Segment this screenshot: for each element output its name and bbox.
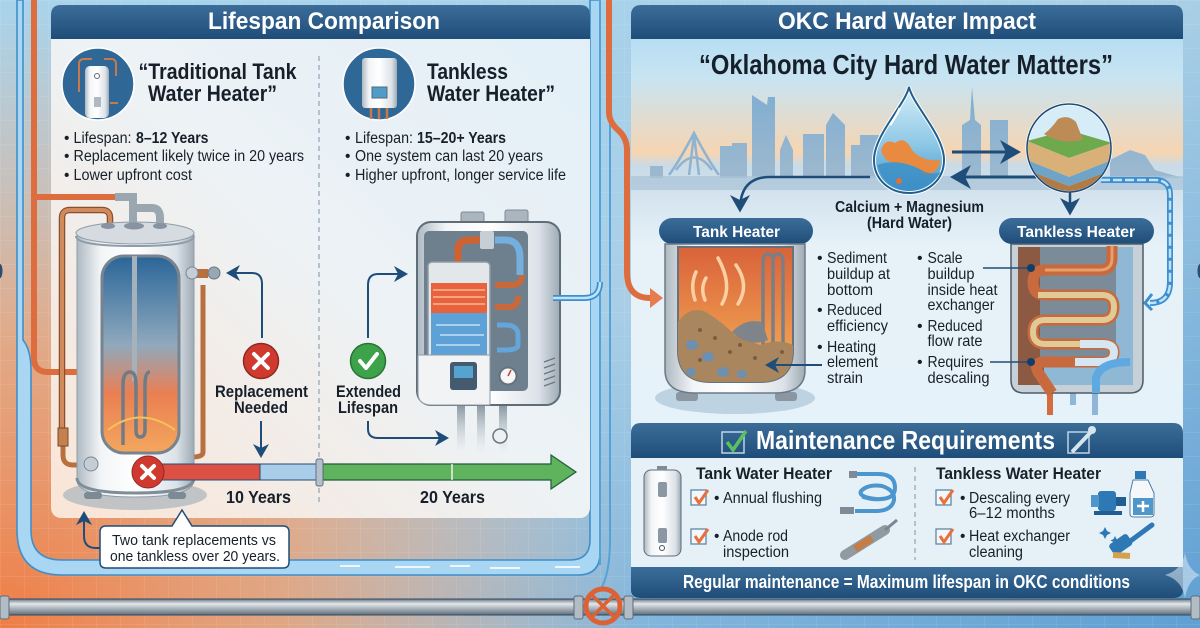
list: tank facts: Lifespan:	[74, 130, 132, 147]
text: traditional tank heading: Water Heater”	[148, 81, 277, 106]
text: traditional tank heading: “Traditional Tank	[138, 59, 297, 84]
list: tankless heater effects: •	[917, 354, 923, 371]
check box 2	[691, 529, 708, 544]
pressure valve	[186, 267, 220, 279]
icon: start x	[132, 456, 164, 488]
list: tankless maintenance: •	[960, 490, 965, 507]
icon: wrench box	[1068, 426, 1096, 453]
list: tank maintenance: •	[714, 490, 719, 507]
divider	[914, 467, 916, 560]
list: tank heater effects: •	[817, 302, 823, 319]
arrow: drop to tank heater	[740, 177, 870, 210]
heading: lifespan comparison	[51, 5, 590, 39]
label: replacement needed: Replacement	[215, 383, 308, 401]
list: tankless maintenance: cleaning	[969, 544, 1023, 561]
list: tank facts	[64, 130, 304, 184]
sparkle	[1165, 553, 1200, 598]
check box 1	[691, 490, 708, 505]
heading: OKC hard water impact	[631, 5, 1183, 39]
callout: replacements: one tankless over 20 years.	[110, 548, 280, 565]
top fittings	[115, 197, 160, 226]
label: extended lifespan: Lifespan	[338, 399, 398, 417]
leader: requires descaling	[990, 358, 1035, 366]
list: tankless heater effects: flow rate	[928, 333, 983, 350]
pill: tankless heater: Tankless Heater	[1017, 224, 1135, 241]
icon: hose	[840, 471, 895, 514]
list: tank heater effects: Heating	[827, 339, 876, 356]
list: tankless maintenance: •	[960, 528, 965, 545]
arrow: drop to geology	[952, 150, 1018, 154]
list: tankless heater effects: Reduced	[928, 318, 982, 335]
list: tankless facts: 15–20+ Years	[417, 130, 506, 147]
label: replacement needed: Needed	[234, 399, 288, 417]
arrow: tank replacement	[228, 273, 262, 338]
list: tank heater effects: Reduced	[827, 302, 882, 319]
icon: red x replacement	[244, 344, 278, 378]
illustration: tank water heater cutaway	[34, 0, 220, 510]
list: tank heater effects: Sediment	[827, 250, 887, 267]
callout: replacements: Two tank replacements vs	[112, 532, 276, 549]
water pipe to tankless	[1101, 180, 1170, 303]
icon: pump	[1091, 491, 1126, 515]
water pipe arrowhead	[1145, 294, 1152, 310]
panel: lifespan comparison	[34, 0, 600, 518]
list: tank facts: •	[64, 148, 69, 165]
list: tank heater effects: element	[827, 354, 878, 371]
list: tankless facts: •	[345, 167, 350, 184]
text: tankless heading	[427, 59, 555, 106]
list: tank heater effects: •	[817, 250, 823, 267]
list: tank facts: Replacement likely twice in 20 years	[74, 148, 304, 165]
illustration: tank sediment cutaway	[655, 244, 815, 414]
illustration: tankless water heater	[417, 210, 560, 452]
list: tankless maintenance: 6–12 months	[969, 505, 1055, 522]
list: tankless heater effects: inside heat	[928, 282, 998, 299]
panel: OKC hard water impact	[631, 5, 1183, 440]
panel: maintenance requirements	[631, 423, 1183, 598]
list: tankless heater effects	[917, 250, 998, 387]
heading: maintenance requirements: Maintenance Requirements	[756, 425, 1055, 455]
list: tank heater effects: efficiency	[827, 318, 888, 335]
list: tank facts: •	[64, 130, 69, 147]
icon: green check	[350, 344, 386, 378]
tank body	[77, 235, 194, 497]
icon: descaler bottle	[1130, 471, 1154, 517]
icon: tankless water heater	[343, 48, 415, 120]
list: tankless heater effects: Scale	[928, 250, 963, 267]
list: tankless facts: Higher upfront, longer service life	[355, 167, 566, 184]
list: tankless facts: •	[345, 148, 350, 165]
list: tankless facts: Lifespan:	[355, 130, 413, 147]
heading: tankless water heater: Tankless Water Heater	[936, 464, 1101, 483]
arrow: extended down	[368, 421, 447, 438]
timeline arrow	[132, 455, 576, 489]
skyline	[631, 87, 1183, 190]
label: calcium magnesium: (Hard Water)	[867, 215, 952, 232]
divider	[318, 56, 320, 503]
icon: valve wheel	[586, 589, 620, 623]
bottom grey pipe	[0, 589, 1200, 623]
check box 4	[936, 529, 953, 544]
icon: anode rod	[845, 520, 897, 555]
edge markers	[0, 264, 1200, 278]
water pipe exit from tankless	[553, 282, 600, 298]
footer: regular maintenance: Regular maintenance = Maximum lifespan in OKC conditions	[683, 572, 1130, 592]
water pipe channel around impact panel	[600, 0, 610, 590]
label: extended lifespan	[336, 383, 401, 417]
arrow: geology to tankless heater	[1069, 192, 1071, 213]
list: tankless heater effects: •	[917, 318, 923, 335]
check box 3	[936, 490, 953, 505]
text: traditional tank heading	[138, 59, 297, 106]
list: tank heater effects: buildup at	[827, 266, 891, 283]
heading: lifespan comparison: Lifespan Comparison	[208, 8, 440, 35]
list: tankless heater effects: Requires	[928, 354, 984, 371]
window with heating element	[102, 256, 179, 453]
leader: scale buildup	[983, 264, 1035, 272]
list: tank maintenance: •	[714, 528, 719, 545]
list: tankless maintenance: Descaling every	[969, 490, 1070, 507]
arrow: to timeline	[260, 421, 262, 456]
heading: OKC hard water impact: OKC Hard Water Impact	[778, 8, 1036, 35]
label: 20 years: 20 Years	[420, 487, 485, 507]
icon: hard water drop	[874, 87, 944, 193]
list: tank maintenance: Annual flushing	[723, 490, 822, 507]
icon: tank water heater	[62, 48, 134, 120]
control panel	[418, 355, 490, 405]
callout: replacements	[100, 510, 289, 568]
title: Oklahoma City hard water matters: “Oklahoma City Hard Water Matters”	[699, 49, 1113, 80]
copper loop pipe	[62, 210, 110, 430]
white water highlights	[340, 566, 580, 568]
icon: mini tank heater	[644, 466, 681, 556]
pill: tank heater	[659, 218, 813, 244]
list: tankless facts	[345, 130, 566, 184]
water pipe frame around lifespan panel	[17, 0, 600, 575]
arrow: sediment leader	[767, 364, 822, 366]
list: tank maintenance: inspection	[723, 544, 789, 561]
list: tank heater effects	[817, 250, 891, 387]
illustration: tankless heat exchanger cutaway	[1011, 244, 1143, 415]
icon: green check box	[722, 431, 746, 453]
list: tank facts: Lower upfront cost	[74, 167, 193, 184]
pill: tankless heater	[999, 218, 1154, 244]
list: tank facts: •	[64, 167, 69, 184]
footer: regular maintenance	[631, 567, 1183, 598]
list: tank maintenance: Anode rod	[723, 528, 788, 545]
list: tank facts: 8–12 Years	[136, 130, 208, 147]
arrow: geology to drop	[953, 176, 1036, 178]
list: tank heater effects: bottom	[827, 282, 873, 299]
label: 10 years: 10 Years	[226, 487, 291, 507]
list: tankless facts: One system can last 20 years	[355, 148, 543, 165]
heading: maintenance requirements	[631, 423, 1183, 458]
copper serpentine coil	[1033, 246, 1114, 393]
label: extended lifespan: Extended	[336, 383, 401, 401]
list: tankless maintenance	[936, 490, 1070, 561]
text: tankless heading: Tankless	[427, 59, 508, 84]
list: tankless facts: •	[345, 130, 350, 147]
list: tankless heater effects: descaling	[928, 370, 990, 387]
label: calcium magnesium: Calcium + Magnesium	[835, 199, 984, 216]
list: tankless maintenance: Heat exchanger	[969, 528, 1070, 545]
list: tankless heater effects: buildup	[928, 266, 975, 283]
orange supply pipe left	[34, 0, 118, 372]
arrow: callout to tank	[84, 513, 100, 548]
icon: cleaning brush	[1099, 525, 1152, 556]
pill: tank heater: Tank Heater	[693, 224, 780, 241]
list: tankless heater effects: exchanger	[928, 297, 995, 314]
arrow: extended up	[368, 274, 406, 338]
list: tank heater effects: •	[817, 339, 823, 356]
list: tank maintenance	[691, 490, 822, 561]
list: tankless heater effects: •	[917, 250, 923, 267]
icon: geology sphere	[1027, 104, 1112, 195]
orange pipe to tank heater	[609, 0, 663, 308]
label: replacement needed	[215, 383, 308, 417]
text: tankless heading: Water Heater”	[427, 81, 555, 106]
heading: tank water heater: Tank Water Heater	[696, 464, 832, 483]
label: calcium magnesium	[835, 199, 984, 232]
list: tank heater effects: strain	[827, 370, 863, 387]
